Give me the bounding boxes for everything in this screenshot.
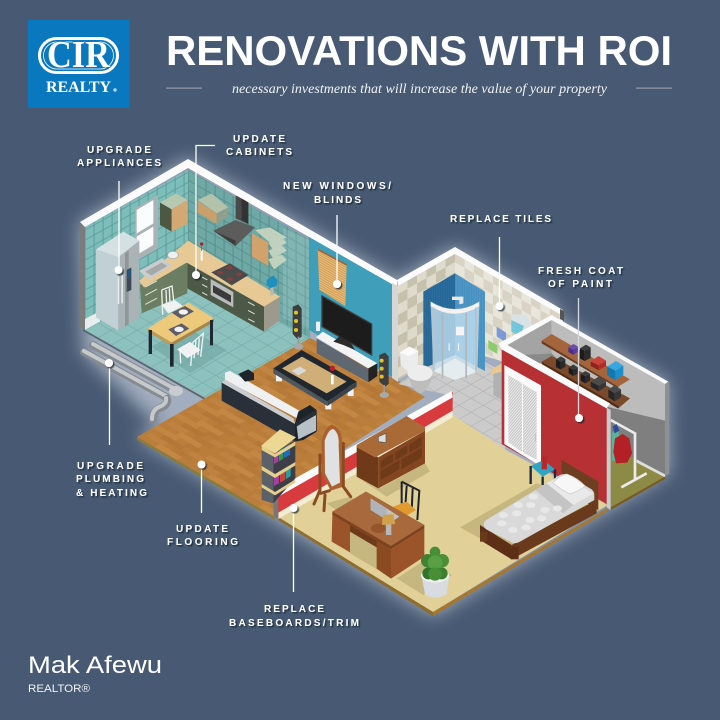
- wall top trim: [498, 315, 668, 408]
- chair at desk: [393, 482, 419, 520]
- bathroom tile floor: [398, 347, 510, 452]
- cooktop: [211, 263, 249, 285]
- dining table: [148, 303, 214, 367]
- boxes on shelves: [556, 344, 623, 401]
- header logo: CIR Realty: [28, 20, 130, 108]
- living room wall: [283, 228, 394, 378]
- range hood: [213, 195, 255, 246]
- TV stand: [316, 332, 377, 382]
- living room furniture: [316, 248, 389, 398]
- closet baseboard and side: [611, 382, 669, 510]
- closet walls: [507, 320, 665, 510]
- plumbing pipes: [84, 344, 183, 420]
- label: new windows/blinds: BLINDS: [314, 195, 361, 206]
- label: upgrade plumbing and heating: UPGRADE: [77, 461, 143, 472]
- outlet: [316, 322, 320, 331]
- agent name and title: Mak Afewu: [28, 652, 162, 679]
- floor shadows: [327, 463, 452, 595]
- speaker right: [379, 353, 389, 398]
- label: upgrade appliances: UPGRADE: [87, 145, 151, 156]
- agent name and title: REALTOR®: [28, 683, 90, 695]
- label: upgrade plumbing and heating: PLUMBING: [76, 474, 144, 485]
- shelves: [542, 334, 630, 409]
- standing mirror: [314, 425, 351, 511]
- label: fresh coat of paint: [538, 266, 623, 290]
- closet room: [498, 315, 669, 510]
- callout lines and dots: [105, 146, 583, 592]
- plant: [421, 547, 449, 598]
- header logo: CIR Realty: CIR: [47, 34, 110, 76]
- kitchen furniture: [96, 193, 287, 373]
- mattress: [484, 474, 594, 543]
- chair front: [178, 333, 203, 366]
- shower and toilet: [400, 273, 485, 393]
- upper cabinet right: [198, 193, 228, 224]
- chair back: [162, 286, 182, 315]
- desk: [332, 492, 424, 579]
- closet olive floor: [611, 446, 665, 507]
- sofa: [222, 369, 317, 442]
- red feature wall: [502, 349, 607, 504]
- half wall with baseboard: [274, 391, 453, 519]
- partition end: [607, 408, 611, 510]
- blinds: [318, 248, 347, 306]
- nightstand: [531, 457, 555, 485]
- shower tile walls: [423, 273, 485, 371]
- lower cabinets: [140, 260, 280, 332]
- label: replace baseboards/trim: REPLACE: [264, 604, 324, 615]
- label: upgrade appliances: [77, 145, 161, 169]
- table shadow: [152, 327, 227, 373]
- oven: [211, 279, 233, 307]
- coffee table: [273, 350, 357, 409]
- label: upgrade plumbing and heating: & HEATING: [76, 488, 147, 499]
- bedroom beige floor: [278, 415, 608, 616]
- label: update flooring: UPDATE: [176, 524, 228, 535]
- kitchen back walls: [80, 170, 310, 341]
- bathroom walls: [392, 247, 564, 382]
- subtitle with rules: necessary investments that will increase the value of your property: [232, 82, 608, 97]
- kitchen room: [80, 170, 310, 400]
- header logo: CIR Realty: REALTY: [46, 79, 111, 96]
- towels and vanity: [488, 314, 533, 400]
- foreground furniture: [222, 350, 452, 598]
- house glow: [80, 159, 669, 616]
- fridge: [96, 232, 139, 331]
- label: replace baseboards/trim: BASEBOARDS/TRIM: [229, 618, 359, 629]
- label: fresh coat of paint: OF PAINT: [548, 279, 612, 290]
- label: replace tiles: REPLACE TILES: [450, 214, 551, 225]
- bedroom and closet: [278, 315, 669, 616]
- bed shadow: [460, 483, 600, 557]
- headboard: [562, 460, 598, 510]
- label: update cabinets: UPDATE: [233, 134, 285, 145]
- title: RENOVATIONS WITH ROI: [166, 27, 672, 74]
- label: fresh coat of paint: FRESH COAT: [538, 266, 623, 277]
- label: update cabinets: [226, 134, 292, 158]
- upper cabinet left: [160, 193, 187, 232]
- callout labels: [76, 134, 623, 629]
- speaker left: [293, 304, 303, 350]
- dresser: [357, 416, 425, 488]
- closet door: [504, 365, 541, 467]
- counter top: [139, 241, 280, 307]
- mattress band and spots: [497, 475, 593, 533]
- dish and vase: [168, 242, 203, 261]
- label: new windows/blinds: NEW WINDOWS/: [283, 181, 391, 192]
- label: replace baseboards/trim: [229, 604, 359, 629]
- clothes rack: [611, 420, 647, 487]
- wood floor: [137, 338, 425, 520]
- sink: [139, 258, 172, 280]
- bookshelf: [261, 429, 296, 503]
- bed frame: [480, 500, 597, 559]
- toilet: [400, 347, 433, 393]
- table lamp blue: [267, 275, 277, 295]
- bed and nightstand: [460, 457, 600, 559]
- kitchen tile floor: [83, 272, 310, 400]
- label: upgrade plumbing and heating: [76, 461, 147, 499]
- agent name and title: [28, 652, 162, 695]
- wall top trim: kitchen and living: [80, 159, 397, 287]
- pillow: [553, 474, 585, 494]
- label: upgrade appliances: APPLIANCES: [77, 158, 161, 169]
- label: new windows/blinds: [283, 181, 391, 206]
- TV: [322, 296, 372, 355]
- label: update flooring: FLOORING: [167, 537, 238, 548]
- shelf unit: [252, 227, 287, 269]
- shower cabin glass: [431, 297, 479, 380]
- label: update cabinets: CABINETS: [226, 147, 292, 158]
- bathroom: [392, 247, 564, 452]
- window: [135, 195, 158, 262]
- label: update flooring: [167, 524, 238, 548]
